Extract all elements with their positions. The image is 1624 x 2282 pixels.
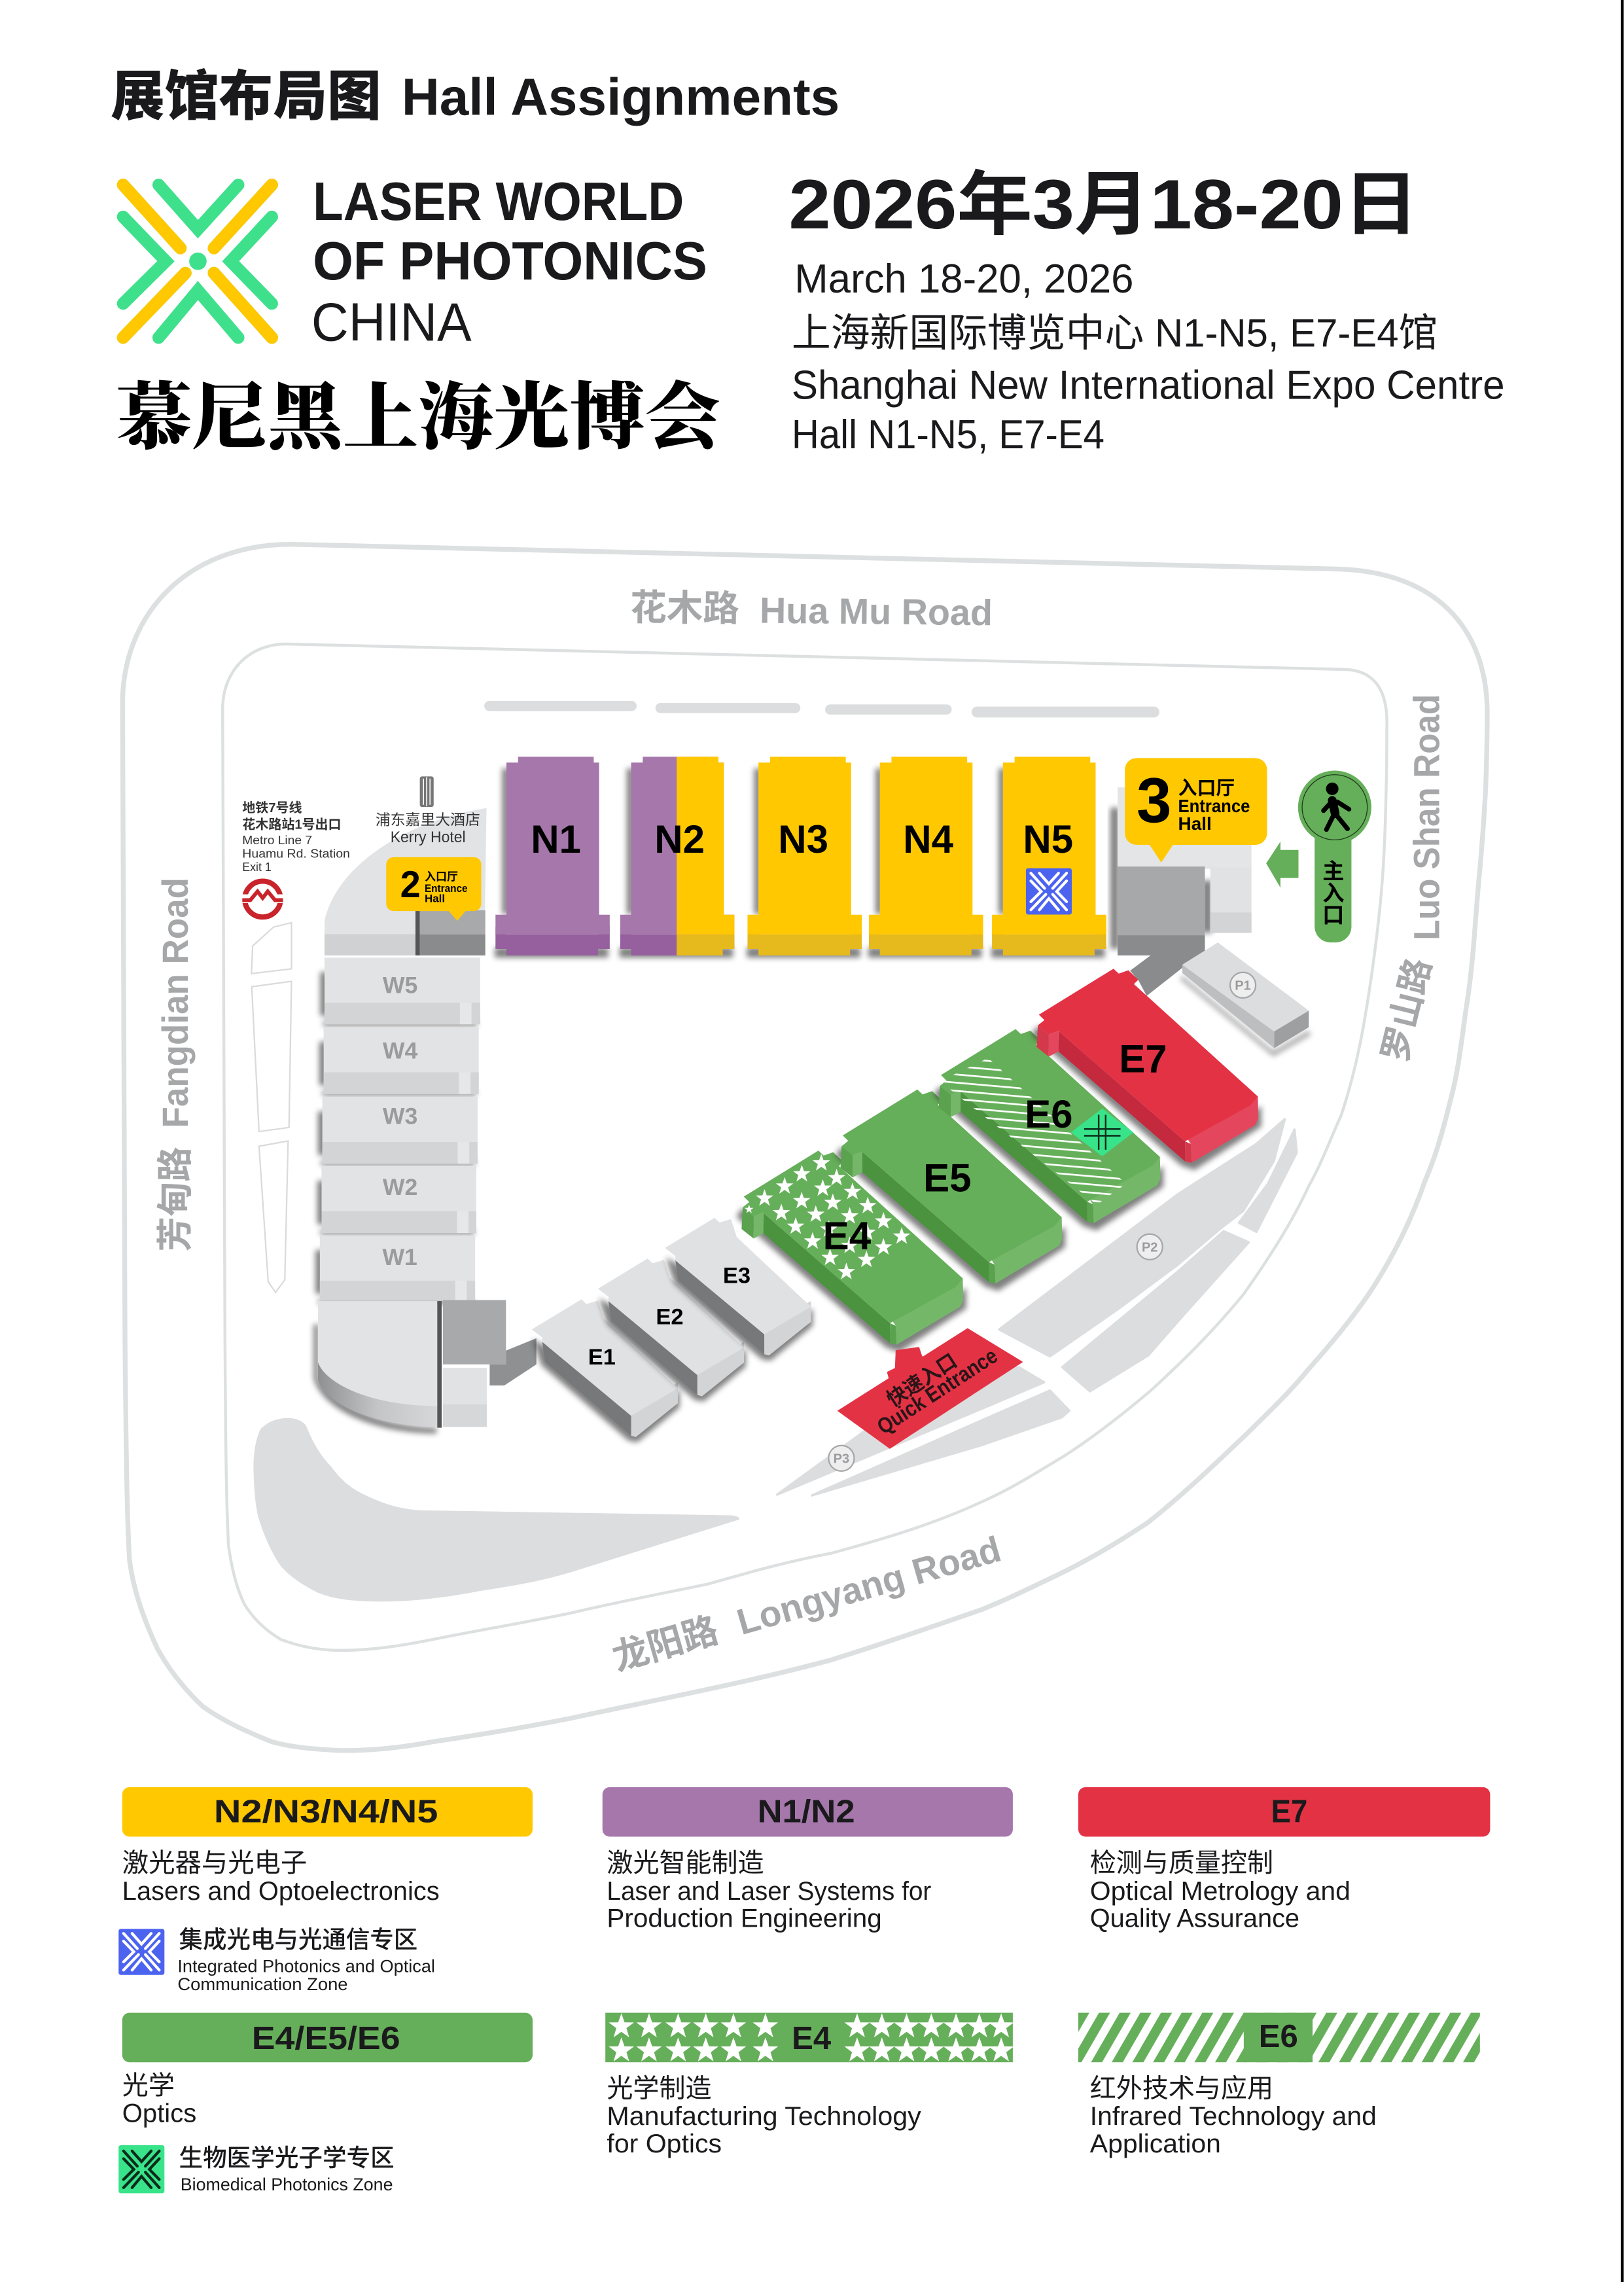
panel: legend N1/N2 xyxy=(603,1787,1013,1933)
label: Kerry Hotel: Kerry Hotel xyxy=(391,829,466,846)
left island outlines xyxy=(251,923,291,1293)
hall E2: E2 xyxy=(656,1305,684,1330)
label: P2: P2 xyxy=(1142,1241,1157,1255)
entrance hall 3 building xyxy=(1110,787,1252,996)
title: Hall Assignments xyxy=(402,68,839,126)
panel: legend N2/N3/N4/N5 xyxy=(118,1787,533,1994)
icon: Shanghai metro xyxy=(240,882,285,917)
quick entrance sign with arrow: Quick Entrance xyxy=(873,1344,1002,1439)
text: manufacturing: for Optics xyxy=(607,2130,722,2158)
bar: E7: E7 xyxy=(1271,1794,1307,1829)
bar: N1/N2 xyxy=(603,1787,1013,1837)
hall W4 xyxy=(319,1027,479,1096)
hall E6: E6 xyxy=(1025,1092,1073,1136)
road label: Luo Shan Road xyxy=(1376,694,1447,1066)
hall E1 xyxy=(532,1299,680,1442)
top road strips xyxy=(484,701,1159,717)
hall E4: E4 xyxy=(823,1214,872,1258)
callout: entrance hall 2: 2 xyxy=(400,864,421,906)
text: biomedical photonics: 生物医学光子学专区 xyxy=(179,2145,395,2171)
icon: pedestrian main entrance xyxy=(1298,771,1371,942)
hall W3: W3 xyxy=(383,1103,417,1130)
hall E3 xyxy=(665,1218,813,1361)
date and venue: 上海新国际博览中心 N1-N5, E7-E4馆 xyxy=(792,311,1438,355)
bar: N2/N3/N4/N5 xyxy=(122,1787,533,1837)
panel: legend E6 xyxy=(1078,2013,1480,2158)
icon: integrated photonics xyxy=(118,1929,164,1975)
label: P3 xyxy=(828,1446,854,1471)
text: manufacturing: Manufacturing Technology xyxy=(607,2102,921,2131)
hall W5: W5 xyxy=(383,972,417,998)
text: infrared: Infrared Technology and xyxy=(1090,2102,1377,2131)
text: lasers: 激光器与光电子 xyxy=(122,1849,307,1878)
hall N4 xyxy=(868,757,983,957)
hall N4: N4 xyxy=(903,817,954,861)
E4 star pattern xyxy=(745,1154,910,1279)
label: metro exit: Metro Line 7 xyxy=(242,834,312,847)
hall N5 xyxy=(991,757,1106,957)
panel: legend E4 xyxy=(605,2013,1014,2158)
text: integrated photonics: Integrated Photonics and Optical xyxy=(177,1956,435,1976)
hall N3: N3 xyxy=(778,817,828,861)
logo: Laser World of Photonics China: LASER WORLD xyxy=(313,172,684,232)
text: lasers: Lasers and Optoelectronics xyxy=(122,1877,440,1906)
text: metrology: Optical Metrology and xyxy=(1090,1877,1350,1906)
road label: Hua Mu Road xyxy=(630,587,993,633)
date and venue xyxy=(788,165,1505,457)
date and venue: 2026年3月18-20日 xyxy=(788,165,1419,243)
road label: Fangdian Road: Fangdian Road xyxy=(155,878,196,1128)
callout: entrance hall 3: 3 xyxy=(1137,764,1171,836)
text: biomedical photonics xyxy=(179,2145,395,2194)
landscape: grey lawn bottom-left xyxy=(253,1418,739,1601)
title: 展馆布局图 xyxy=(111,67,381,127)
road label: Longyang Road: 龙阳路 xyxy=(608,1610,722,1679)
hall N1 xyxy=(495,757,610,957)
bar: E4/E5/E6 xyxy=(122,2013,533,2062)
road label: Luo Shan Road: Luo Shan Road xyxy=(1407,694,1447,940)
bar: E6 stripes xyxy=(1078,2013,1480,2062)
icon: pedestrian main entrance: 口 xyxy=(1322,904,1345,928)
hall W3 xyxy=(318,1097,478,1166)
text: integrated photonics: Communication Zone xyxy=(177,1974,348,1994)
hall N5: N5 xyxy=(1023,817,1073,861)
road label: Hua Mu Road: Hua Mu Road xyxy=(760,590,993,633)
date and venue: March 18-20, 2026 xyxy=(794,257,1134,302)
text: optics xyxy=(122,2071,196,2128)
quick entrance sign with arrow: 快速入口 xyxy=(883,1349,961,1411)
road label: Longyang Road: Longyang Road xyxy=(732,1529,1005,1643)
hall W1: W1 xyxy=(382,1244,417,1270)
text: integrated photonics xyxy=(177,1927,435,1994)
hall E7 xyxy=(1031,969,1262,1170)
text: lasers xyxy=(122,1849,440,1906)
hall E5 xyxy=(836,1090,1065,1291)
label: metro exit: Exit 1 xyxy=(242,861,272,874)
label: metro exit: 花木路站1号出口 xyxy=(242,817,342,832)
bar: E4 stars: E4 xyxy=(792,2021,831,2056)
label: Kerry Hotel xyxy=(376,811,480,846)
bar: E7 xyxy=(1078,1787,1490,1837)
panel: site map xyxy=(122,544,1487,1751)
hall N1: N1 xyxy=(531,817,581,861)
label: P3: P3 xyxy=(834,1452,849,1466)
road label: Longyang Road xyxy=(608,1529,1005,1679)
entrance hall 2 building xyxy=(325,808,486,955)
title xyxy=(111,67,839,127)
text: laser systems: Production Engineering xyxy=(607,1904,882,1933)
icon: biomedical photonics zone on E6 xyxy=(1071,1109,1133,1156)
hall W2: W2 xyxy=(383,1174,417,1200)
text: infrared: Application xyxy=(1090,2130,1221,2158)
arrow: main entrance xyxy=(1266,842,1298,887)
callout: entrance hall 3 xyxy=(1125,758,1267,863)
hall W1 xyxy=(315,1236,475,1304)
parking islands xyxy=(777,1119,1297,1495)
text: metrology xyxy=(1090,1849,1350,1933)
hall W5 xyxy=(320,957,480,1026)
label: P1: P1 xyxy=(1235,978,1251,993)
hall E7: E7 xyxy=(1119,1037,1167,1081)
bar: E4 stars xyxy=(605,2013,1014,2062)
bar: N1/N2: N1/N2 xyxy=(758,1794,855,1829)
text: laser systems xyxy=(607,1849,931,1933)
hall E2 xyxy=(598,1258,746,1402)
event Chinese name: 慕尼黑上海光博会 xyxy=(116,359,722,463)
text: metrology: 检测与质量控制 xyxy=(1090,1849,1273,1878)
callout: entrance hall 3: Entrance xyxy=(1178,796,1250,816)
label: metro exit xyxy=(242,800,350,874)
outer road outline xyxy=(122,544,1487,1751)
text: biomedical photonics: Biomedical Photonics Zone xyxy=(181,2175,393,2194)
callout: entrance hall 3: Hall xyxy=(1178,813,1212,834)
hall N3 xyxy=(747,757,862,957)
hall N2 xyxy=(620,757,734,957)
hall E3: E3 xyxy=(723,1264,750,1289)
callout: entrance hall 2 xyxy=(386,857,481,921)
road label: Fangdian Road: 芳甸路 xyxy=(155,1147,196,1252)
text: optics: Optics xyxy=(122,2099,196,2128)
logo: Laser World of Photonics China xyxy=(123,172,707,352)
callout: entrance hall 3: 入口厅 xyxy=(1178,778,1235,799)
hall E1: E1 xyxy=(588,1345,616,1370)
callout: entrance hall 2: Entrance xyxy=(425,882,468,895)
text: laser systems: Laser and Laser Systems for xyxy=(607,1877,931,1906)
icon: pedestrian main entrance: 主 xyxy=(1322,860,1345,884)
label: P2 xyxy=(1137,1234,1163,1260)
bar: N2/N3/N4/N5: N2/N3/N4/N5 xyxy=(214,1794,438,1829)
road label: Fangdian Road xyxy=(155,878,196,1252)
logo: Laser World of Photonics China: OF PHOTONICS xyxy=(313,232,707,291)
callout: entrance hall 2: Hall xyxy=(425,892,445,904)
date and venue: Shanghai New International Expo Centre xyxy=(792,363,1505,408)
inner road outline xyxy=(222,644,1387,1650)
label: metro exit: 地铁7号线 xyxy=(242,800,302,815)
text: integrated photonics: 集成光电与光通信专区 xyxy=(179,1927,417,1953)
label: Kerry Hotel: 浦东嘉里大酒店 xyxy=(376,811,480,828)
hall N2: N2 xyxy=(654,817,705,861)
icon: integrated photonics zone on N5 xyxy=(1026,868,1072,914)
text: metrology: Quality Assurance xyxy=(1090,1904,1299,1933)
hall W2 xyxy=(317,1166,476,1234)
callout: entrance hall 2: 入口厅 xyxy=(425,870,458,883)
text: optics: 光学 xyxy=(122,2071,175,2100)
bar: E6 stripes: E6 xyxy=(1259,2019,1298,2054)
hall W4: W4 xyxy=(383,1038,417,1064)
icon: biomedical photonics xyxy=(118,2145,164,2193)
hall E4 xyxy=(736,1150,966,1352)
label: metro exit: Huamu Rd. Station xyxy=(242,847,350,861)
icon: pedestrian main entrance: 入 xyxy=(1322,882,1345,906)
road label: Hua Mu Road: 花木路 xyxy=(630,587,739,629)
bar: E4/E5/E6: E4/E5/E6 xyxy=(252,2021,400,2056)
text: manufacturing xyxy=(607,2075,921,2158)
hall E6 xyxy=(931,1029,1163,1230)
label: P1 xyxy=(1230,972,1256,998)
road label: Luo Shan Road: 罗山路 xyxy=(1376,955,1439,1066)
parking P1 building xyxy=(1180,942,1311,1057)
logo: Laser World of Photonics China: CHINA xyxy=(311,293,472,352)
text: laser systems: 激光智能制造 xyxy=(607,1849,764,1878)
hotel icon xyxy=(420,776,434,807)
text: manufacturing: 光学制造 xyxy=(607,2075,712,2103)
hall E5: E5 xyxy=(923,1156,972,1200)
text: infrared xyxy=(1090,2075,1377,2158)
panel: legend E4/E5/E6 xyxy=(118,2013,533,2194)
date and venue: Hall N1-N5, E7-E4 xyxy=(792,412,1104,457)
panel: legend E7 xyxy=(1078,1787,1490,1933)
text: infrared: 红外技术与应用 xyxy=(1090,2075,1273,2103)
right edge border xyxy=(1621,0,1624,2282)
south-west corner building xyxy=(313,1300,537,1433)
